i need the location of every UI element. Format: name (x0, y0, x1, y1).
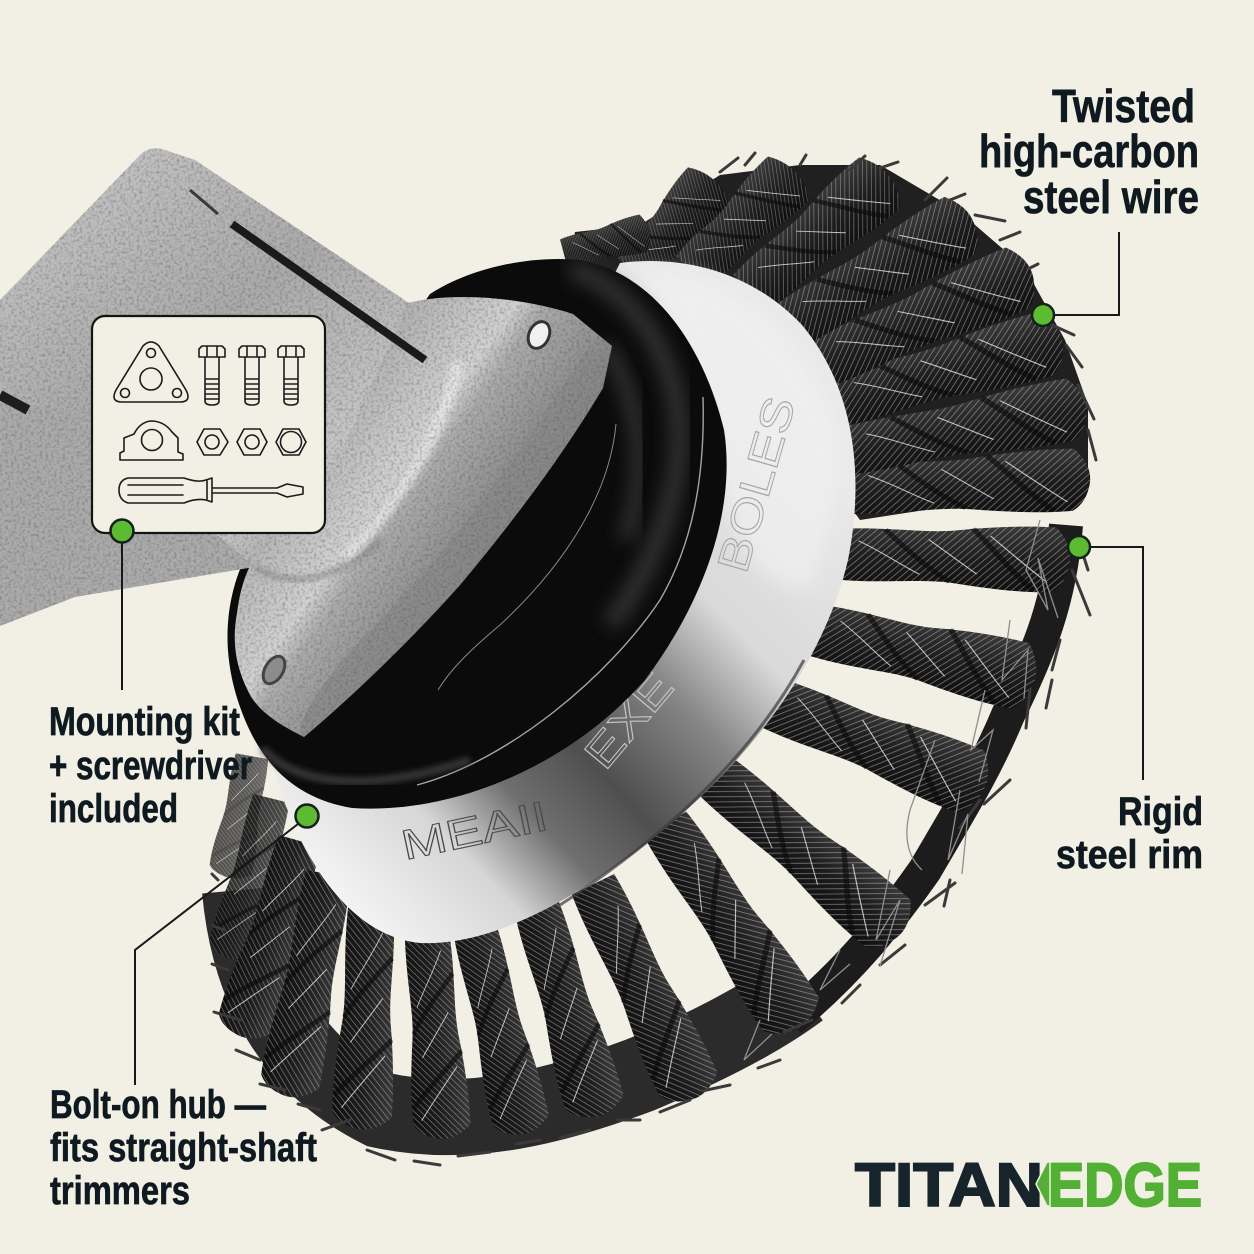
heading: twisted wire label: Twisted (1052, 80, 1195, 132)
upper wire knots backing (570, 165, 1088, 520)
icon: hex nuts (197, 429, 306, 455)
upper shaft block (0, 148, 452, 567)
wire brush (206, 150, 1096, 1165)
cast aluminium gearbox housing (0, 148, 612, 737)
heading: mounting kit label: included (49, 787, 178, 831)
flange top bolt hole (524, 318, 554, 352)
frayed wire ends (212, 153, 1096, 1165)
lower flange crease (255, 540, 380, 579)
logo (855, 1151, 1202, 1219)
silver steel rim: EXE (575, 663, 683, 778)
heading: rim label (1056, 790, 1203, 877)
heading: rim label: Rigid (1118, 790, 1203, 834)
callout: rim (1068, 536, 1143, 780)
heading: mounting kit label (49, 700, 252, 831)
panel: mounting kit inset (92, 316, 325, 533)
knot wire tangles (744, 520, 1058, 1060)
heading: hub label: trimmers (50, 1169, 190, 1213)
icon: screwdriver (119, 478, 303, 503)
silver steel rim: BOLES (709, 391, 805, 578)
logo: EDGE (1048, 1151, 1202, 1219)
black rubber gasket (227, 259, 727, 809)
power cable (0, 395, 28, 410)
heading: mounting kit label: Mounting kit (49, 700, 240, 744)
engraved rim text: MEAII (397, 792, 552, 869)
casting notch (190, 190, 218, 214)
lower shaft (0, 392, 300, 626)
flange lower bolt hole (259, 653, 289, 687)
heading: hub label: fits straight-shaft (50, 1126, 317, 1170)
callout: wire (1032, 232, 1119, 326)
icon: triangular plate (114, 342, 188, 402)
heading: hub label: Bolt-on hub — (50, 1083, 266, 1127)
twisted wire strands (206, 150, 1092, 1142)
shaft groove (232, 224, 425, 360)
heading: hub label (50, 1083, 317, 1213)
heading: twisted wire label: steel wire (1023, 171, 1199, 223)
callout: mounting kit (110, 520, 134, 690)
right outer fused knot band (790, 525, 1066, 1020)
icon: pillow bracket (120, 421, 183, 460)
flange shaded edge (301, 345, 603, 737)
lower outer fused knot band (240, 890, 800, 1117)
logo: TITAN (855, 1151, 1043, 1219)
flange plate (235, 297, 612, 737)
heading: mounting kit label: + screwdriver (49, 744, 252, 788)
heading: twisted wire label: high-carbon (979, 125, 1199, 177)
flange ridge highlight (345, 362, 458, 560)
silver steel rim (274, 261, 856, 943)
callout: hub (135, 804, 318, 1085)
heading: rim label: steel rim (1056, 833, 1203, 877)
icon: bolts (199, 346, 304, 405)
heading: twisted wire label (979, 80, 1199, 223)
